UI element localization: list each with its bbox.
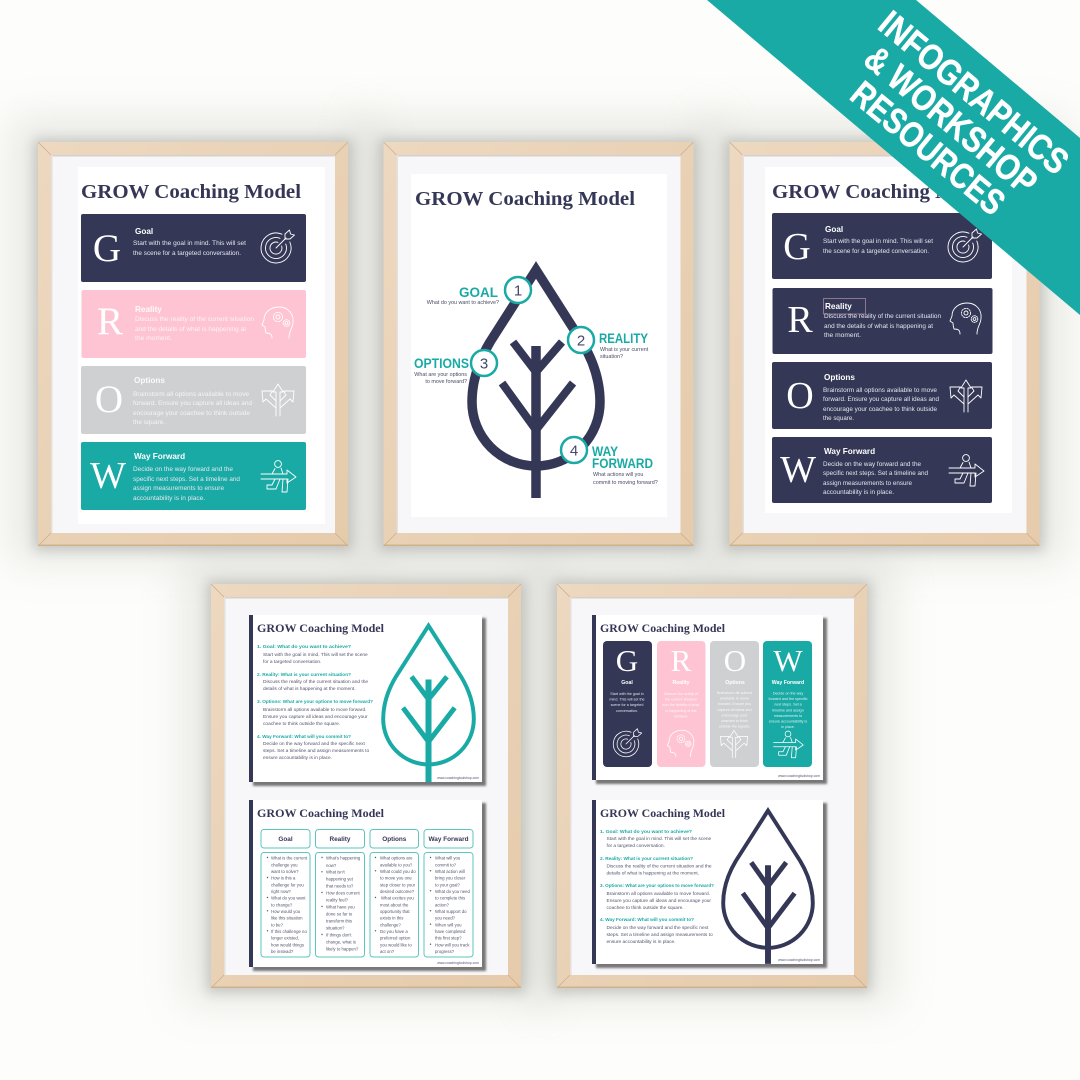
sheet: navy leaf list: for a targeted conversation.: [606, 843, 665, 849]
card: way forward: Way Forward: [824, 447, 875, 456]
card: options: the square.: [823, 415, 854, 422]
card: way forward: W: [90, 455, 126, 497]
column: reality questions: What's happening: [326, 856, 361, 861]
column: R reality: Reality: [672, 680, 690, 686]
paper: [78, 167, 325, 524]
column: options questions: act on?: [380, 949, 395, 954]
card: way forward: specific next steps. Set a timeline and: [823, 470, 928, 477]
card: goal: [81, 214, 306, 282]
column: goal questions: How is this a: [271, 876, 296, 881]
sheet: question columns: [249, 800, 486, 971]
sheet: teal leaf list: for a targeted conversation.: [263, 659, 321, 665]
sheet: teal leaf list: 2. Reality: What is your current situation?: [257, 672, 351, 678]
column: reality questions: happening yet: [326, 876, 354, 881]
card: way forward: assign measurements to ensure: [133, 485, 224, 492]
step 2: reality: [568, 327, 649, 360]
card: reality: [772, 288, 992, 354]
column: R reality: and the details of what: [663, 703, 699, 707]
card: reality: the moment.: [824, 332, 861, 339]
column: reality questions: likely to happen?: [326, 947, 359, 952]
column: goal questions: to be?: [271, 922, 284, 927]
sheet: navy leaf list: 3. Options: What are your options to move forward?: [600, 883, 714, 889]
column: options questions: to move you one: [380, 876, 412, 881]
card: goal: [772, 213, 992, 279]
column: options questions: What could you do: [380, 869, 416, 874]
corner banner: [707, 0, 1080, 315]
column: G goal: scene for a targeted: [611, 703, 643, 707]
column: G goal: mind. This will set the: [609, 698, 645, 702]
card: goal: G: [783, 226, 811, 268]
column: G goal: Goal: [621, 680, 633, 686]
column: way forward questions: When will you: [435, 922, 462, 927]
card: goal: Goal: [135, 227, 153, 236]
card: way forward: assign measurements to ensure: [823, 480, 912, 487]
column: goal questions: If this challenge no: [271, 929, 307, 934]
sheet: teal leaf list: Decide on the way forward and the specific next: [263, 741, 366, 747]
column: way forward questions: have completed: [435, 929, 466, 934]
column: options questions: Do you have a: [380, 929, 408, 934]
column: options questions: you would like to: [380, 942, 412, 947]
card: reality: [82, 290, 306, 358]
sheet: navy leaf list: coachee to think outside the square.: [606, 905, 684, 911]
column: goal questions: longer existed,: [271, 936, 299, 941]
sheet: navy leaf list: steps. Set a timeline and assign measurements to: [606, 932, 713, 938]
column: W way forward: in place.: [781, 725, 795, 729]
step 3: options: [414, 350, 497, 385]
sheet: teal leaf list: Discuss the reality of the current situation and the: [263, 679, 368, 685]
step 2: reality: situation?: [600, 354, 623, 360]
column: reality questions: that needs to?: [326, 884, 354, 889]
column: reality questions: If things don't: [326, 933, 352, 938]
step 2: reality: 2: [577, 332, 585, 350]
card: goal: Start with the goal in mind. This will set: [823, 238, 933, 245]
sheet: navy leaf list: www.coachingtoolshop.com: [778, 958, 820, 962]
column: goal questions: What do you want: [271, 896, 306, 901]
column: options questions: What excites you: [381, 896, 414, 901]
card: options: forward. Ensure you capture all ideas and: [823, 396, 939, 403]
sheet: navy leaf list: details of what is happening at the moment.: [606, 870, 699, 876]
card: way forward: specific next steps. Set a timeline and: [133, 476, 240, 483]
column: goal questions: challenge you: [271, 862, 298, 867]
sheet: teal leaf list: [249, 615, 486, 786]
icon: teal leaf: [383, 626, 474, 782]
card: way forward: accountability is in place.: [133, 495, 205, 502]
column: reality questions: situation?: [326, 925, 345, 930]
column: W way forward: [763, 641, 812, 767]
step 3: options: to move forward?: [425, 379, 467, 385]
card: goal: the scene for a targeted conversation.: [823, 248, 929, 255]
card: options: O: [786, 375, 814, 417]
column: W way forward: Way Forward: [772, 680, 804, 686]
column: R reality: the current situation: [665, 698, 697, 702]
column: way forward questions: What do you need: [435, 889, 470, 894]
step 3: options: 3: [480, 356, 488, 372]
frame 2: leaf diagram poster: [380, 139, 698, 551]
card: way forward: Way Forward: [134, 452, 185, 461]
column: reality questions: How does current: [326, 891, 360, 896]
sheet: teal leaf list: details of what is happening at the moment.: [263, 686, 356, 692]
card: way forward: Decide on the way forward and the: [823, 461, 921, 468]
column: way forward questions: to your goal?: [435, 882, 460, 887]
column: R reality: R: [671, 643, 692, 678]
step 4: way forward: commit to moving forward?: [593, 480, 658, 486]
column: way forward questions: [424, 830, 473, 957]
column: goal questions: How would you: [271, 909, 301, 914]
column: way forward questions: this first step?: [435, 936, 462, 941]
column: goal questions: want to solve?: [271, 869, 299, 874]
card: options: forward. Ensure you capture all ideas and: [133, 400, 252, 407]
sheet: navy leaf list: 2. Reality: What is your current situation?: [600, 856, 693, 862]
column: way forward questions: Way Forward: [428, 836, 469, 843]
sheet: navy leaf list: [592, 800, 827, 968]
step 1: goal: 1: [514, 282, 522, 300]
card: goal: Start with the goal in mind. This will set: [133, 240, 246, 247]
column: way forward questions: How will you track: [435, 942, 470, 947]
sheet: navy leaf list: Start with the goal in mind. This will set the scene: [606, 836, 712, 842]
step 4: way forward: What actions will you: [593, 472, 643, 478]
step 3: options: OPTIONS: [414, 356, 469, 371]
sheet: navy leaf list: Discuss the reality of the current situation and the: [606, 864, 712, 870]
card: way forward: W: [780, 449, 816, 491]
column: W way forward: timeline and assign: [772, 708, 804, 712]
card: options: Brainstorm all options available to move: [133, 391, 249, 398]
column: O options: Brainstorm all options: [717, 691, 752, 695]
column: options questions: step closer to your: [380, 882, 416, 887]
card: goal: the scene for a targeted conversation.: [133, 250, 241, 257]
step 2: reality: What is your current: [600, 347, 649, 353]
column: goal questions: like this situation: [271, 916, 303, 921]
title: GROW Coaching Model: [415, 188, 635, 210]
card: reality: R: [787, 299, 813, 341]
icon: navy leaf: [723, 811, 813, 964]
step 4: way forward: [561, 437, 658, 486]
step 2: reality: REALITY: [599, 331, 648, 346]
step 1: goal: GOAL: [459, 285, 498, 300]
step 1: goal: What do you want to achieve?: [427, 300, 499, 306]
card: options: [772, 362, 992, 429]
paper: [765, 167, 1012, 513]
sheet: navy leaf list: Brainstorm all options available to move forward.: [606, 891, 710, 897]
sheet: teal leaf list: 3. Options: What are your options to move forward?: [257, 699, 373, 705]
column: W way forward: W: [773, 643, 803, 678]
card: goal: G: [93, 227, 121, 270]
card: options: Options: [134, 376, 165, 385]
card: options: encourage your coachee to think outside: [823, 406, 937, 413]
column: way forward questions: What support do: [435, 909, 467, 914]
column: goal questions: how would things: [271, 942, 304, 947]
column: O options: forward. Ensure you: [718, 702, 751, 706]
column: options questions: desired outcome?: [380, 889, 415, 894]
column: goal questions: What is the current: [271, 856, 308, 861]
column: reality questions: What isn't: [326, 870, 346, 875]
column: way forward questions: progress?: [435, 949, 455, 954]
sheet: teal leaf list: Start with the goal in mind. This will set the scene: [263, 652, 368, 658]
column: goal questions: be instead?: [271, 949, 294, 954]
sheet: GROW columns: GROW Coaching Model: [600, 621, 726, 635]
column: way forward questions: bring you closer: [435, 876, 466, 881]
column: R reality: is happening at the: [665, 709, 697, 713]
step 4: way forward: WAY: [592, 444, 618, 459]
card: goal: Goal: [825, 225, 843, 234]
step 4: way forward: FORWARD: [592, 456, 653, 471]
sheet: navy leaf list: ensure accountability is in place.: [606, 939, 676, 945]
card: reality: R: [97, 300, 123, 343]
sheet: teal leaf list: GROW Coaching Model: [257, 621, 385, 635]
sheet: teal leaf list: coachee to think outside the square.: [263, 721, 340, 727]
column: options questions: available to you?: [380, 862, 413, 867]
column: reality questions: change, what is: [326, 939, 356, 944]
card: reality: Reality: [135, 305, 162, 314]
column: R reality: moment.: [674, 714, 688, 718]
column: goal questions: to change?: [271, 902, 293, 907]
column: O options: outside the square.: [719, 725, 750, 729]
column: reality questions: Reality: [330, 836, 351, 843]
frame 3: navy card poster: [726, 139, 1044, 551]
sheet: question columns: GROW Coaching Model: [257, 806, 385, 820]
column: G goal: conversation.: [616, 709, 638, 713]
column: W way forward: measurements to: [774, 714, 802, 718]
card: reality: Reality: [825, 302, 852, 311]
card: way forward: [81, 442, 306, 510]
title: GROW Coaching Model: [772, 181, 992, 203]
sheet: navy leaf list: Ensure you capture all ideas and encourage your: [606, 898, 711, 904]
banner text: RESOURCES: [843, 73, 1013, 223]
sheet: teal leaf list: ensure accountability is in place.: [263, 755, 332, 761]
column: reality questions: What have you: [326, 905, 355, 910]
frame 5: two landscape sheets: [553, 581, 871, 993]
sheet: teal leaf list: Ensure you capture all ideas and encourage your: [263, 714, 368, 720]
card: way forward: [772, 437, 992, 503]
title: GROW Coaching Model: [81, 181, 301, 203]
column: goal questions: challenge for you: [271, 882, 304, 887]
card: options: [81, 366, 306, 434]
card: way forward: accountability is in place.: [823, 489, 894, 496]
column: reality questions: reality feel?: [326, 898, 349, 903]
column: reality questions: transform this: [326, 918, 352, 923]
column: goal questions: [261, 830, 310, 957]
column: options questions: [370, 830, 418, 957]
column: W way forward: forward and the specific: [769, 697, 808, 701]
column: options questions: most about the: [380, 902, 409, 907]
column: O options: coachee to think: [721, 719, 748, 723]
column: G goal: [603, 641, 652, 767]
card: reality: and the details of what is happening at: [824, 323, 933, 330]
column: way forward questions: to complete this: [435, 896, 465, 901]
step 4: way forward: 4: [570, 442, 578, 460]
column: options questions: opportunity that: [380, 909, 410, 914]
column: options questions: challenge?: [380, 922, 401, 927]
sheet: question columns: www.coachingtoolshop.com: [437, 961, 479, 965]
sheet: teal leaf list: 4. Way Forward: What will you commit to?: [257, 734, 351, 740]
column: G goal: Start with the goal in: [610, 692, 644, 696]
step 1: goal: [427, 277, 531, 306]
column: options questions: preferred option: [380, 936, 411, 941]
column: way forward questions: you need?: [435, 916, 456, 921]
column: options questions: exists in this: [380, 916, 403, 921]
column: O options: O: [724, 643, 746, 678]
column: way forward questions: action?: [435, 902, 449, 907]
column: R reality: [657, 641, 706, 767]
column: O options: [710, 641, 759, 767]
card: options: encourage your coachee to think outside: [133, 410, 250, 417]
column: O options: capture all ideas and: [717, 708, 752, 712]
frame 4: two landscape sheets: [207, 581, 525, 993]
sheet: navy leaf list: Decide on the way forward and the specific next: [606, 925, 709, 931]
column: W way forward: next steps. Set a: [774, 703, 803, 707]
sheet: teal leaf list: steps. Set a timeline and assign measurements to: [263, 748, 369, 754]
column: way forward questions: commit to?: [435, 862, 457, 867]
sheet: navy leaf list: 4. Way Forward: What will you commit to?: [600, 917, 694, 923]
sheet: GROW columns: [592, 615, 827, 784]
card: reality: and the details of what is happening at: [135, 326, 246, 333]
card: options: Options: [824, 373, 855, 382]
column: goal questions: Goal: [278, 836, 293, 843]
sheet: teal leaf list: Brainstorm all options available to move forward.: [263, 707, 366, 713]
sheet: navy leaf list: GROW Coaching Model: [600, 806, 726, 820]
column: R reality: Discuss the reality of: [664, 692, 699, 696]
column: O options: Options: [725, 680, 745, 686]
sheet: navy leaf list: 1. Goal: What do you want to achieve?: [600, 829, 692, 835]
card: way forward: Decide on the way forward and the: [133, 466, 233, 473]
column: reality questions: [316, 830, 364, 957]
column: G goal: G: [616, 643, 638, 678]
banner text: & WORKSHOP: [857, 37, 1045, 203]
column: options questions: What options are: [380, 856, 413, 861]
card: options: the square.: [133, 419, 165, 426]
column: way forward questions: What will you: [435, 856, 461, 861]
column: O options: available to move: [720, 697, 749, 701]
column: goal questions: right now?: [271, 889, 291, 894]
card: reality: the moment.: [135, 335, 172, 342]
column: reality questions: done so far to: [326, 911, 353, 916]
sheet: teal leaf list: 1. Goal: What do you want to achieve?: [257, 644, 351, 650]
paper: [411, 174, 667, 517]
column: O options: encourage your: [722, 713, 748, 717]
card: options: Brainstorm all options available to move: [823, 387, 937, 394]
leaf diagram: [472, 270, 600, 498]
column: W way forward: ensure accountability is: [769, 720, 807, 724]
frame 1: colour card poster: [34, 139, 352, 551]
step 3: options: What are your options: [414, 372, 467, 378]
sheet: teal leaf list: www.coachingtoolshop.com: [437, 776, 479, 780]
column: options questions: Options: [382, 836, 407, 843]
card: reality: Discuss the reality of the current situation: [135, 316, 254, 323]
sheet: GROW columns: www.coachingtoolshop.com: [778, 774, 820, 778]
column: W way forward: Decide on the way: [773, 692, 803, 696]
column: reality questions: now?: [326, 863, 337, 868]
card: reality: Discuss the reality of the current situation: [824, 313, 941, 320]
column: way forward questions: What action will: [435, 869, 465, 874]
card: options: O: [95, 378, 123, 421]
